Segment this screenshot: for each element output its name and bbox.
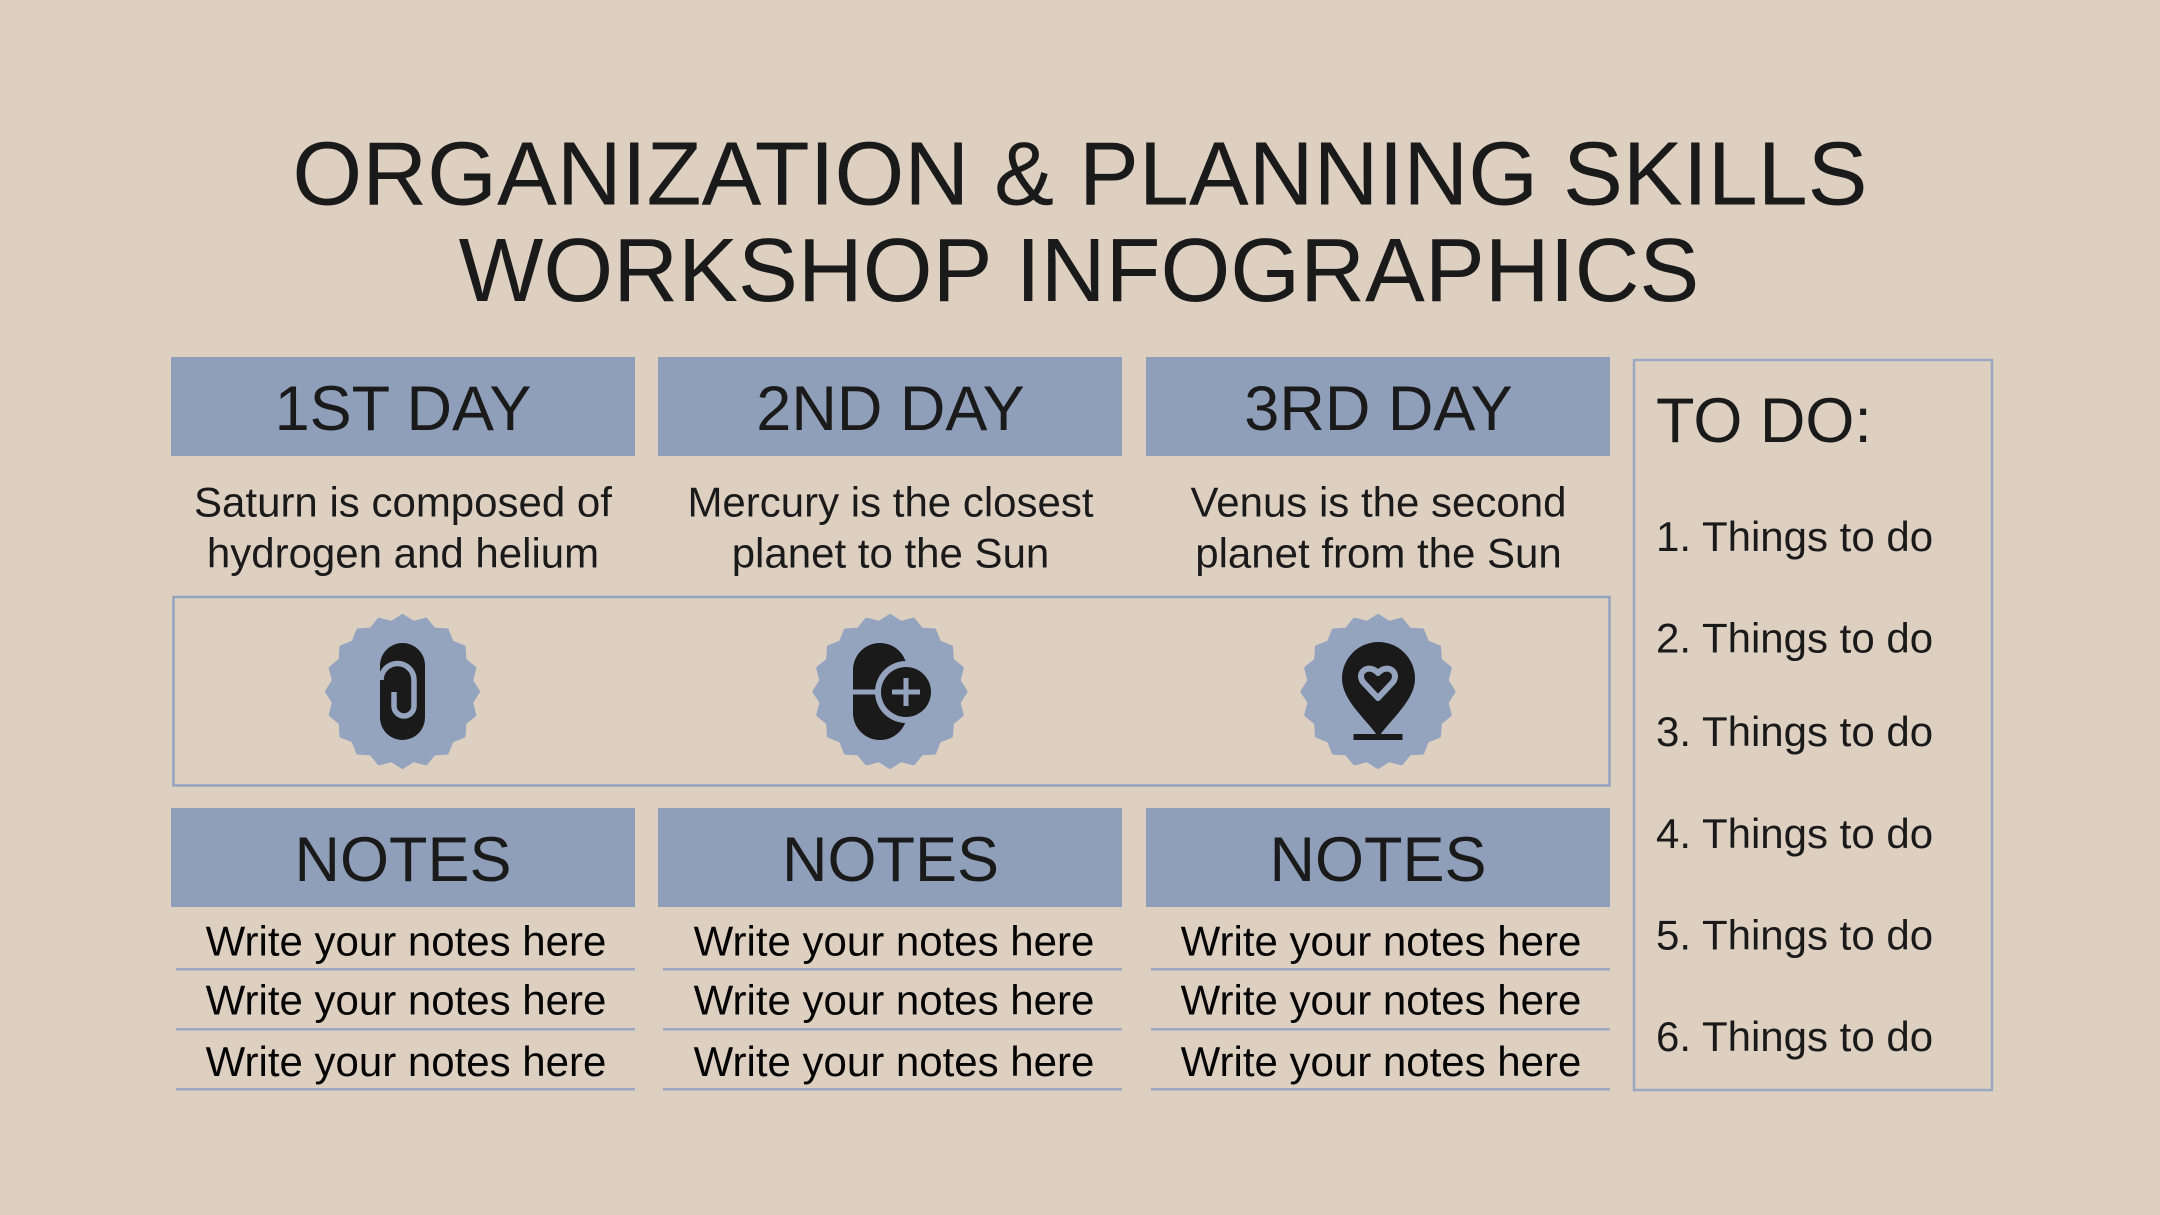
notes list 2 xyxy=(663,918,1122,1090)
list: things to do: 5. Things to do xyxy=(1656,912,1933,958)
notes list 2: Write your notes here xyxy=(694,976,1094,1024)
notes list 2: Write your notes here xyxy=(694,918,1094,964)
panel: icon strip xyxy=(174,597,1610,786)
panel: 1st day header: 1ST DAY xyxy=(275,374,531,444)
notes list 1 xyxy=(176,918,635,1090)
title: ORGANIZATION & PLANNING SKILLS xyxy=(292,124,1868,224)
notes list 3 xyxy=(1151,918,1610,1090)
text: 2nd day description xyxy=(687,478,1094,576)
heading: to do: TO DO: xyxy=(1656,386,1872,456)
text: 1st day description xyxy=(194,478,612,576)
icon: heart map pin badge xyxy=(1302,616,1454,767)
list: things to do: 6. Things to do xyxy=(1656,1013,1933,1060)
notes list 3: Write your notes here xyxy=(1181,918,1581,964)
icon: mouse with plus badge xyxy=(814,616,966,767)
notes list 3: Write your notes here xyxy=(1181,976,1581,1024)
panel: to do list xyxy=(1634,360,1992,1090)
panel: notes 1 header xyxy=(171,808,635,907)
notes list 1: Write your notes here xyxy=(206,1038,606,1085)
text: 2nd day description: planet to the Sun xyxy=(732,530,1049,576)
notes list 2: Write your notes here xyxy=(694,1038,1094,1085)
text: 3rd day description xyxy=(1191,478,1566,576)
panel: notes 3 header: NOTES xyxy=(1269,825,1487,895)
text: 3rd day description: Venus is the second xyxy=(1191,478,1566,526)
notes list 1: Write your notes here xyxy=(206,918,606,964)
list: things to do: 1. Things to do xyxy=(1656,513,1933,560)
list: things to do: 3. Things to do xyxy=(1656,708,1933,755)
icon: paperclip badge xyxy=(327,616,478,767)
title: WORKSHOP INFOGRAPHICS xyxy=(459,221,1699,321)
text: 3rd day description: planet from the Sun xyxy=(1195,530,1562,576)
panel: 3rd day header xyxy=(1146,357,1610,456)
panel: 2nd day header xyxy=(658,357,1122,456)
notes list 1: Write your notes here xyxy=(206,976,606,1024)
list: things to do: 4. Things to do xyxy=(1656,810,1933,857)
panel: 1st day header xyxy=(171,357,635,456)
panel: notes 2 header: NOTES xyxy=(782,825,999,895)
text: 1st day description: hydrogen and helium xyxy=(207,530,599,576)
text: 1st day description: Saturn is composed of xyxy=(194,478,612,526)
panel: notes 1 header: NOTES xyxy=(294,825,512,895)
panel: 2nd day header: 2ND DAY xyxy=(756,374,1025,444)
panel: notes 3 header xyxy=(1146,808,1610,907)
panel: 3rd day header: 3RD DAY xyxy=(1244,374,1513,444)
title xyxy=(292,124,1868,321)
text: 2nd day description: Mercury is the closest xyxy=(687,478,1094,526)
list: things to do: 2. Things to do xyxy=(1656,614,1933,662)
list: things to do xyxy=(1656,513,1933,1060)
notes list 3: Write your notes here xyxy=(1181,1038,1581,1085)
panel: notes 2 header xyxy=(658,808,1122,907)
